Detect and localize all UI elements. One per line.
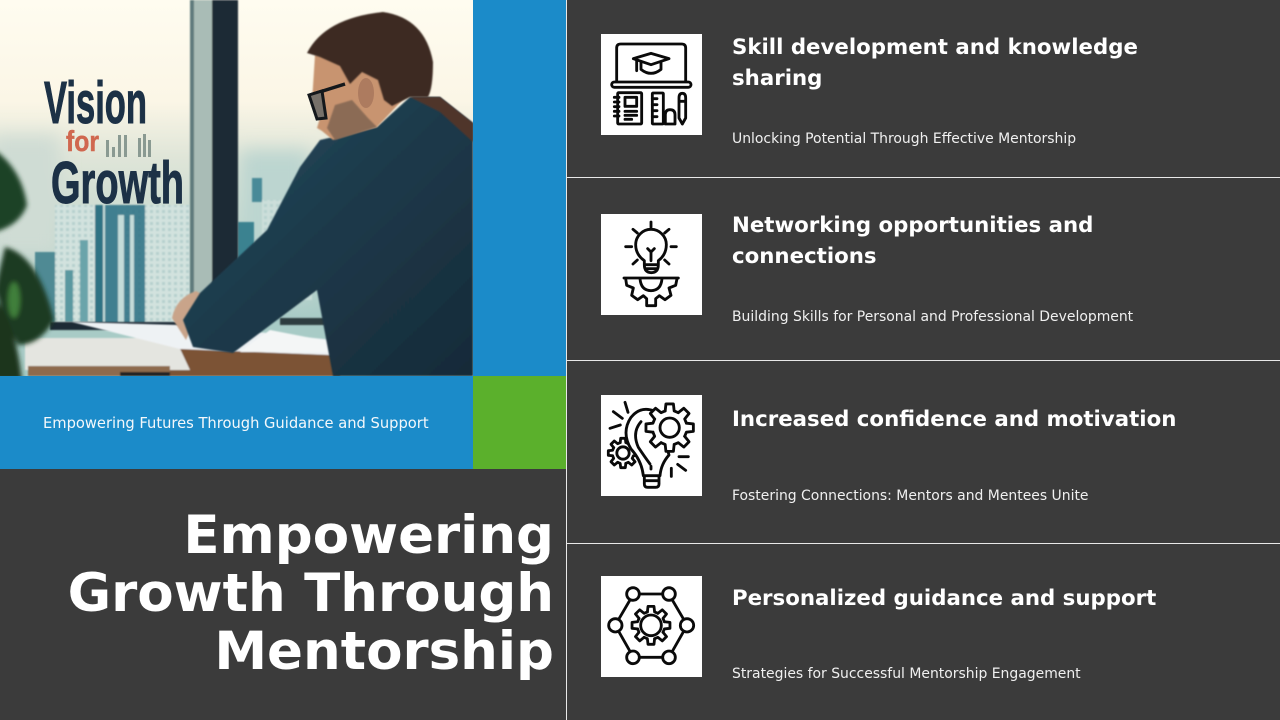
description: Strategies for Successful Mentorship Engagement [732, 666, 1081, 682]
title: Empowering [183, 505, 554, 566]
desk [25, 322, 340, 376]
photo text: Vision for Growth: Growth [51, 150, 184, 216]
city left [35, 178, 312, 325]
item 2: networking [601, 213, 1133, 325]
photo text: Vision for Growth [44, 70, 184, 216]
heading: Networking opportunities and [732, 213, 1093, 238]
jacket [183, 97, 473, 376]
heading: Skill development and knowledge [732, 35, 1138, 60]
icon: bulb with gears [601, 395, 702, 496]
city haze [0, 135, 310, 300]
description: Unlocking Potential Through Effective Mentorship [732, 131, 1076, 147]
item 4: personalized guidance [601, 576, 1156, 682]
subtitle text: Empowering Futures Through Guidance and Support [43, 415, 429, 432]
title: Mentorship [214, 621, 554, 682]
photo text: Vision for Growth: Vision [44, 70, 147, 136]
vertical divider [566, 0, 567, 720]
item 3: confidence [601, 395, 1176, 504]
panel: green accent block [473, 376, 566, 469]
description: Building Skills for Personal and Professional Development [732, 309, 1133, 325]
icon: laptop with graduation cap and study tools [601, 34, 702, 134]
photo text: Vision for Growth: for [66, 126, 99, 158]
heading [732, 35, 1138, 90]
item 1: skill development [601, 34, 1138, 147]
panel: blue side block [473, 0, 566, 376]
head [312, 55, 410, 140]
hand [172, 291, 205, 340]
title [68, 505, 554, 682]
description: Fostering Connections: Mentors and Mentees Unite [732, 488, 1088, 504]
icon: light bulb and gear [601, 214, 702, 315]
icon: hexagon network with gear [601, 576, 702, 676]
title: Growth Through [68, 563, 554, 624]
heading: Personalized guidance and support [732, 586, 1156, 611]
heading [732, 213, 1093, 268]
heading: sharing [732, 66, 822, 90]
panel: blue subtitle band [0, 376, 473, 469]
heading: Increased confidence and motivation [732, 407, 1176, 432]
heading: connections [732, 244, 877, 268]
window frame [50, 0, 325, 330]
plant [0, 150, 54, 380]
panel: photo of man at window [0, 0, 473, 376]
